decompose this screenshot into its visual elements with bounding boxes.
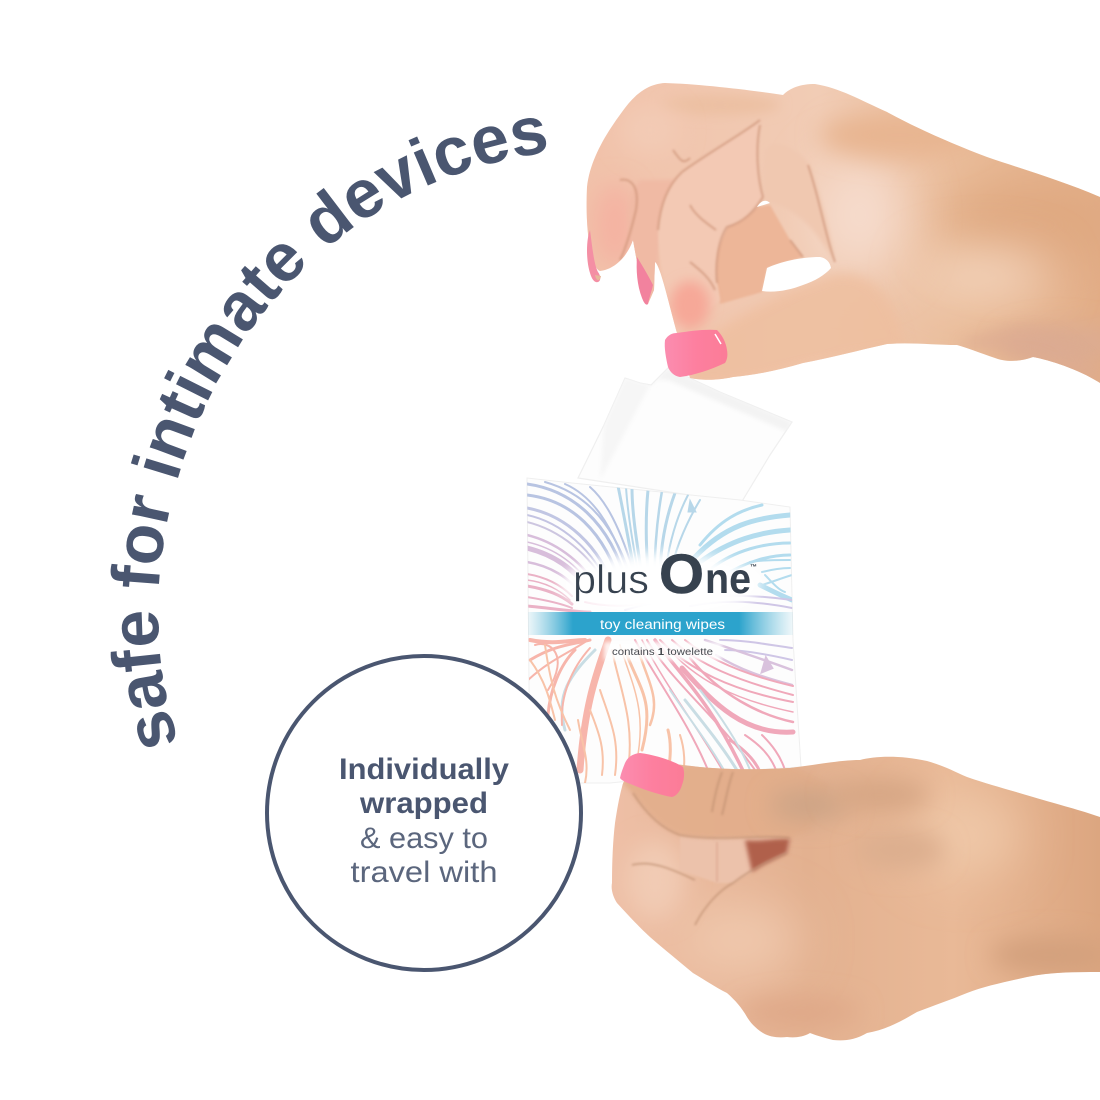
thumb: [622, 764, 796, 839]
packet logo: plusOne: plus: [573, 558, 649, 602]
packet logo: plusOne: ne: [705, 555, 751, 603]
curved heading: safe for intimate devices: safe for intimate devices: [110, 118, 546, 747]
lower thumb: [690, 273, 905, 386]
packet caption: contains 1 towelette: contains 1 towelette: [612, 646, 713, 658]
gaps between fingers: [762, 257, 831, 292]
teal band: [528, 612, 793, 635]
foil packet: [527, 478, 801, 783]
white glow behind logo: [560, 553, 760, 617]
nail on lower thumb: [620, 753, 684, 797]
callout text: Individually: [339, 753, 509, 786]
callout text: & easy to: [360, 822, 488, 855]
packet logo: plusOne: O: [659, 542, 704, 605]
upper hand pinching the wipe: [587, 83, 1100, 386]
lower hand holding the packet: [612, 753, 1100, 1040]
creases: [632, 772, 790, 925]
callout text: [339, 753, 509, 889]
band label: toy cleaning wipes: toy cleaning wipes: [600, 617, 725, 632]
web of hand: [796, 169, 832, 254]
third finger behind: [712, 205, 803, 304]
fingers folded inside: [681, 837, 776, 883]
callout text: wrapped: [359, 787, 488, 820]
nails on upper hand: [587, 230, 727, 377]
round callout: [267, 656, 581, 970]
packet logo: plusOne: ™: [750, 564, 757, 571]
skin light and shade: [625, 795, 1100, 1026]
skin light and shade: [593, 95, 1100, 365]
front index finger: [658, 178, 752, 332]
callout text: travel with: [350, 856, 498, 889]
packet swirl pattern: [527, 482, 793, 783]
white wipe pulled from the packet: [578, 368, 792, 503]
creases: [620, 120, 835, 290]
